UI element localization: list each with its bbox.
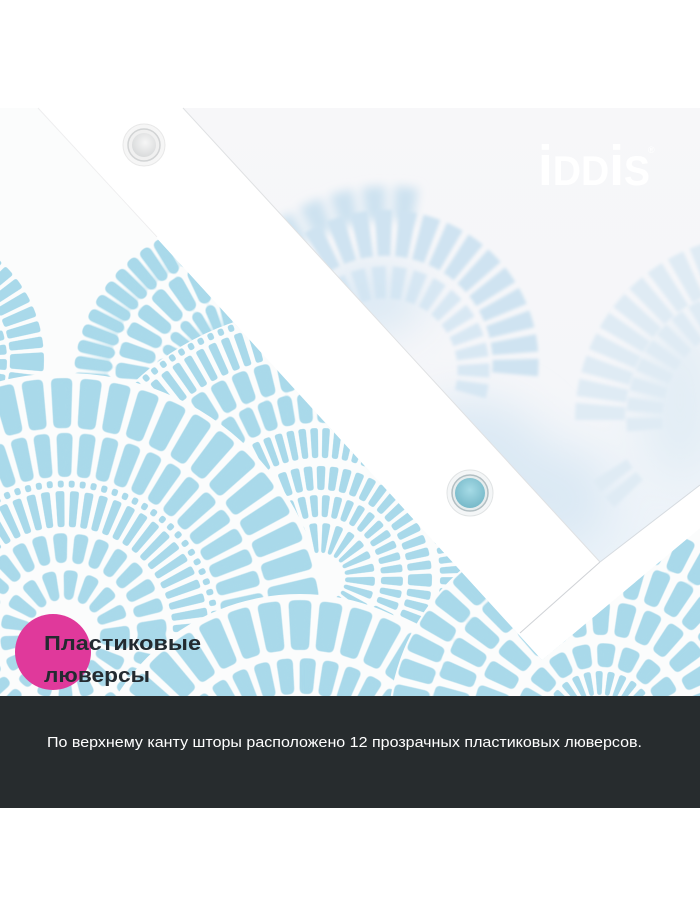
infographic canvas — [0, 108, 700, 808]
logo: iDDiS: iDDiS — [538, 134, 650, 198]
heading: plastic grommets: Пластиковые — [44, 633, 201, 655]
scallop: large left fan — [0, 373, 319, 696]
soft blue tint — [315, 265, 700, 550]
scallop: far left fan — [0, 260, 44, 382]
icon: upper plastic grommet — [123, 124, 165, 166]
icon: pink accent circle — [15, 614, 91, 690]
panel: white side hem band — [520, 485, 700, 660]
faded fan: centre sharper petals — [300, 233, 516, 395]
scallop: bottom right fan — [390, 539, 700, 696]
faded fan: right — [600, 261, 700, 495]
icon: lower plastic grommet — [447, 470, 493, 516]
panel: dark caption band — [0, 696, 700, 808]
caption text: По верхнему канту шторы расположено 12 прозрачных пластиковых люверсов. — [47, 735, 642, 751]
scallop: upper fan by the hem — [74, 240, 359, 460]
scallop: central fan — [136, 322, 570, 660]
panel: reverse side of curtain showing through — [183, 108, 700, 568]
faded fan: outer blurred row — [282, 182, 421, 244]
hem stitching and fold lines — [38, 108, 700, 633]
logo: registered mark: ® — [648, 145, 655, 155]
panel: white top hem band — [38, 108, 600, 660]
scallop: bottom centre fan — [119, 594, 414, 696]
heading: plastic grommets: люверсы — [44, 665, 150, 687]
panel: patterned curtain fabric — [0, 240, 700, 696]
